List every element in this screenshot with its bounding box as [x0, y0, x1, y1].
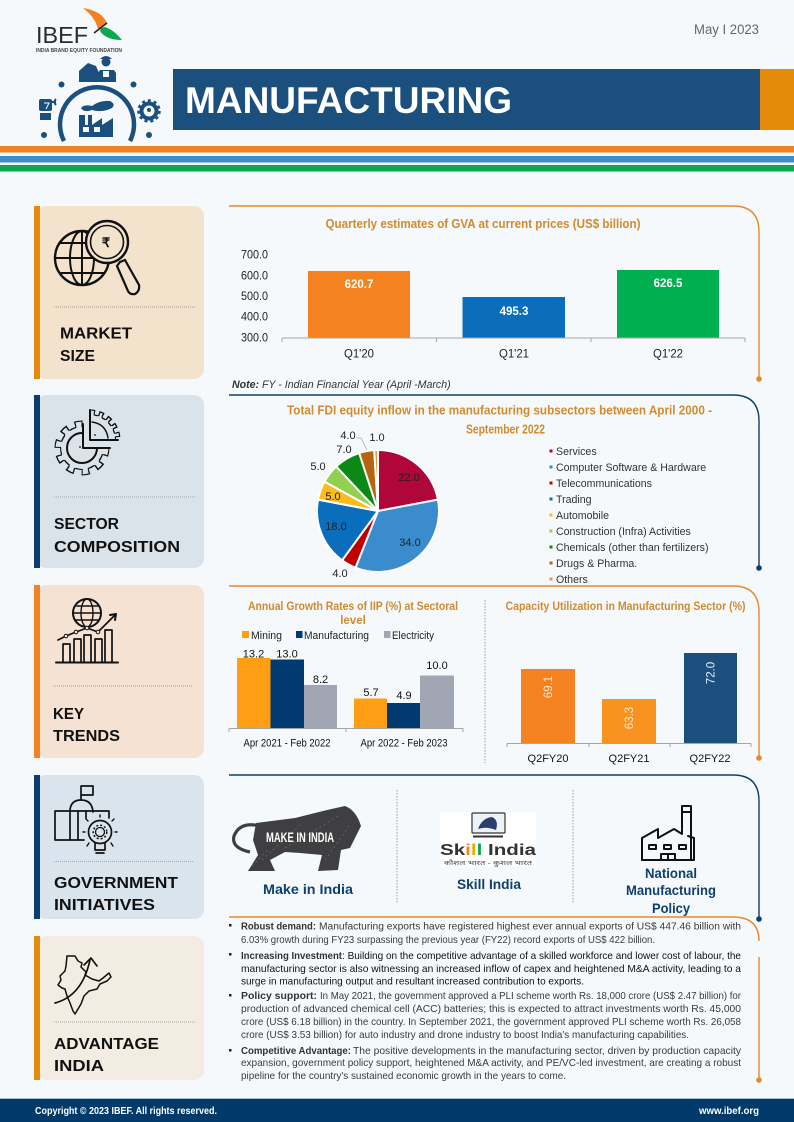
- pie labels: 1.0: [369, 432, 385, 444]
- bullet: robust demand: [229, 922, 741, 946]
- chart title: IIP: level: [340, 615, 366, 627]
- bullet: competitive advantage: [229, 1046, 742, 1082]
- panel: key trends card: [34, 585, 204, 758]
- heading: key trends: [53, 706, 120, 745]
- bar chart: GVA: 500.0: [241, 289, 268, 303]
- bar chart: GVA: [241, 248, 745, 360]
- panel: sector composition card: [34, 395, 204, 568]
- bar chart: GVA: 495.3: [500, 306, 528, 318]
- chart title: IIP: Annual Growth Rates of IIP (%) at Sectoral: [248, 601, 458, 613]
- pie labels: 4.0: [332, 568, 348, 580]
- icon: india map with arrow: [55, 956, 111, 1014]
- bullet: competitive advantage: expansion, government policy support, heightened M&A activity, and PE/VC-led investment, are creating a robust: [241, 1058, 741, 1069]
- heading: sector composition: COMPOSITION: [54, 539, 180, 556]
- footer: www.ibef.org: [698, 1105, 759, 1117]
- bar chart: capacity utilization: [507, 653, 751, 765]
- bullet: robust demand: Manufacturing exports have registered highest ever annual exports of US$ 447.46 billion with: [319, 922, 741, 932]
- bar chart: IIP growth: 8.2: [313, 674, 328, 686]
- title banner: MANUFACTURING: [185, 80, 512, 121]
- chart title: September 2022: [466, 422, 545, 436]
- pie legend: Trading: [556, 494, 592, 506]
- bullet: robust demand: Robust demand:: [241, 922, 316, 932]
- pie labels: 22.0: [398, 472, 420, 484]
- pie labels: 5.0: [325, 491, 341, 503]
- pie legend: Construction (Infra) Activities: [556, 526, 691, 538]
- bar chart: IIP growth: 10.0: [426, 660, 448, 672]
- bar chart: capacity utilization: Q2FY21: [609, 753, 649, 765]
- bar chart: IIP growth: 13.0: [276, 648, 298, 660]
- note: Note: FY - Indian Financial Year (April -March): [232, 379, 451, 391]
- bar chart: IIP growth: 4.9: [396, 690, 412, 702]
- heading: advantage india: ADVANTAGE: [54, 1036, 159, 1053]
- date: May I 2023: [694, 22, 759, 37]
- icon: factory with worker and gear: [39, 56, 160, 141]
- legend: IIP: [242, 630, 434, 642]
- panel: advantage india text: [229, 917, 762, 1083]
- pie labels: 5.0: [310, 461, 326, 473]
- bar chart: capacity utilization: Q2FY20: [528, 753, 568, 765]
- icon: government building and bulb: [55, 786, 117, 853]
- pie chart: FDI: [317, 450, 439, 572]
- pie labels: 7.0: [336, 444, 352, 456]
- bar chart: GVA: 620.7: [345, 279, 373, 291]
- bullet: robust demand: 6.03% growth during FY23 surpassing the previous year (FY22) record exports of US$ 422 billion.: [241, 935, 655, 946]
- panel: advantage india card: [34, 936, 204, 1080]
- legend: IIP: Manufacturing: [304, 630, 369, 642]
- bullet: increasing investment: : Building on the competitive advantage of a skilled workforce and lower cost of labour, the: [342, 951, 741, 962]
- icon: globe and magnifier: [55, 221, 139, 294]
- pie labels: 4.0: [340, 430, 356, 442]
- heading: government initiatives: GOVERNMENT: [54, 875, 179, 892]
- label: skill india: Skill India: [457, 876, 521, 892]
- bar chart: GVA: Q1'20: [344, 346, 374, 360]
- icon: skill india logo: Sk ill India: [440, 842, 536, 859]
- heading: market size: [60, 326, 133, 365]
- bar chart: IIP growth: Apr 2021 - Feb 2022: [244, 738, 330, 750]
- logo: IBEF: IBEF: [36, 22, 88, 48]
- pie legend: [550, 446, 708, 586]
- heading: government initiatives: [54, 875, 179, 914]
- label: national manufacturing policy: [626, 865, 716, 916]
- logo: IBEF: INDIA BRAND EQUITY FOUNDATION: [36, 48, 122, 54]
- footer: Copyright © 2023 IBEF. All rights reserved.: [35, 1105, 217, 1117]
- icon: globe and growth chart: [56, 599, 118, 662]
- bullet: competitive advantage: pipeline for the country's sustained economic growth in the years to come.: [241, 1071, 566, 1082]
- heading: key trends: TRENDS: [53, 728, 120, 745]
- heading: sector composition: [54, 516, 180, 556]
- panel: key trends charts: [229, 586, 762, 765]
- panel: government initiatives content: [229, 775, 762, 922]
- bullet: competitive advantage: The positive developments in the manufacturing sector, driven by production capacity: [353, 1046, 742, 1057]
- bar chart: GVA: Q1'21: [499, 346, 529, 360]
- chart title: Quarterly estimates of GVA at current prices (US$ billion): [326, 217, 640, 231]
- bar chart: capacity utilization: 63.3: [624, 707, 636, 729]
- header stripes: [0, 146, 794, 172]
- bullet: increasing investment: surge in manufacturing output and resultant increased contribution to exports.: [241, 976, 584, 988]
- icon: skill india logo: [440, 812, 536, 867]
- panel: government initiatives card: [34, 775, 204, 919]
- pie labels: 18.0: [325, 521, 347, 533]
- label: make in india: Make in India: [263, 881, 353, 897]
- bar chart: capacity utilization: 72.0: [706, 662, 718, 684]
- icon: make in india lion: MAKE IN INDIA: [266, 829, 334, 845]
- bullet: competitive advantage: Competitive Advantage:: [241, 1046, 351, 1057]
- footer: [0, 1098, 794, 1122]
- legend: IIP: Electricity: [392, 630, 434, 642]
- bar chart: IIP growth: Apr 2022 - Feb 2023: [360, 738, 448, 750]
- bar chart: GVA: 700.0: [241, 248, 268, 262]
- pie legend: Telecommunications: [556, 478, 652, 490]
- bullet: increasing investment: manufacturing sector is also witnessing an increased inflow of capex and heightened M&A activity, leading to a: [241, 964, 741, 975]
- bar chart: GVA: 400.0: [241, 310, 268, 324]
- label: national manufacturing policy: National: [645, 865, 697, 881]
- pie legend: Services: [556, 446, 597, 458]
- pie legend: Computer Software & Hardware: [556, 462, 706, 474]
- heading: market size: MARKET: [60, 326, 133, 342]
- title banner: [173, 69, 794, 130]
- heading: advantage india: [54, 1036, 159, 1075]
- icon: make in india lion: [234, 806, 361, 871]
- bullet: policy support: production of advanced chemical cell (ACC) batteries; this is expected to attract investments worth Rs. 45,000: [241, 1004, 741, 1015]
- icon: factory: [642, 806, 694, 860]
- panel: market size card: [34, 206, 204, 379]
- bullet: policy support: In May 2021, the government approved a PLI scheme worth Rs. 18,000 crore (US$ 2.47 billion) for: [320, 991, 742, 1002]
- bar chart: IIP growth: 5.7: [363, 687, 379, 699]
- bar chart: GVA: 300.0: [241, 330, 268, 344]
- bar chart: GVA: 626.5: [654, 278, 683, 290]
- icon: globe and magnifier: ₹: [102, 235, 111, 250]
- icon: skill india logo: कौशल भारत - कुशल भारत: [444, 859, 532, 867]
- pie legend: Chemicals (other than fertilizers): [556, 542, 708, 554]
- logo: IBEF: [36, 8, 122, 54]
- heading: sector composition: SECTOR: [54, 516, 119, 533]
- pie legend: Automobile: [556, 510, 609, 522]
- pie labels: [310, 430, 421, 580]
- bar chart: IIP growth: 13.2: [243, 648, 264, 660]
- pie labels: 34.0: [399, 537, 421, 549]
- bullet: policy support: Policy support:: [241, 991, 317, 1002]
- label: national manufacturing policy: Manufacturing: [626, 882, 716, 898]
- label: national manufacturing policy: Policy: [652, 900, 690, 916]
- bar chart: capacity utilization: 69.1: [543, 676, 555, 698]
- bar chart: capacity utilization: Q2FY22: [690, 753, 730, 765]
- legend: IIP: Mining: [251, 630, 282, 642]
- heading: market size: SIZE: [60, 348, 95, 365]
- chart title: Total FDI equity inflow in the manufacturing subsectors between April 2000 -: [287, 404, 712, 418]
- panel: market size chart: [229, 206, 762, 391]
- bullet: increasing investment: Increasing Investment: [241, 951, 343, 962]
- bullet: policy support: [229, 991, 742, 1041]
- pie legend: Drugs & Pharma.: [556, 558, 637, 570]
- icon: gear and protractor: [58, 405, 123, 472]
- panel: sector composition chart: [229, 395, 762, 586]
- bar chart: GVA: Q1'22: [653, 346, 683, 360]
- chart title: [287, 404, 712, 436]
- heading: government initiatives: INITIATIVES: [54, 897, 155, 914]
- chart title: capacity utilization: Capacity Utilization in Manufacturing Sector (%): [506, 601, 746, 613]
- chart title: IIP: [248, 601, 458, 627]
- pie legend: Others: [556, 574, 588, 586]
- bullet: policy support: crore (US$ 6.18 billion) in the country. In September 2021, the government approved PLI scheme worth Rs. 26,058: [241, 1017, 741, 1028]
- bar chart: IIP growth: [229, 648, 463, 750]
- heading: key trends: KEY: [53, 706, 85, 723]
- bullet: increasing investment: [229, 951, 741, 988]
- bar chart: GVA: 600.0: [241, 268, 268, 282]
- heading: advantage india: INDIA: [54, 1058, 104, 1075]
- bullet: policy support: crore (US$ 3.53 billion) for auto industry and drone industry to boost India's manufacturing capabilities.: [241, 1030, 689, 1041]
